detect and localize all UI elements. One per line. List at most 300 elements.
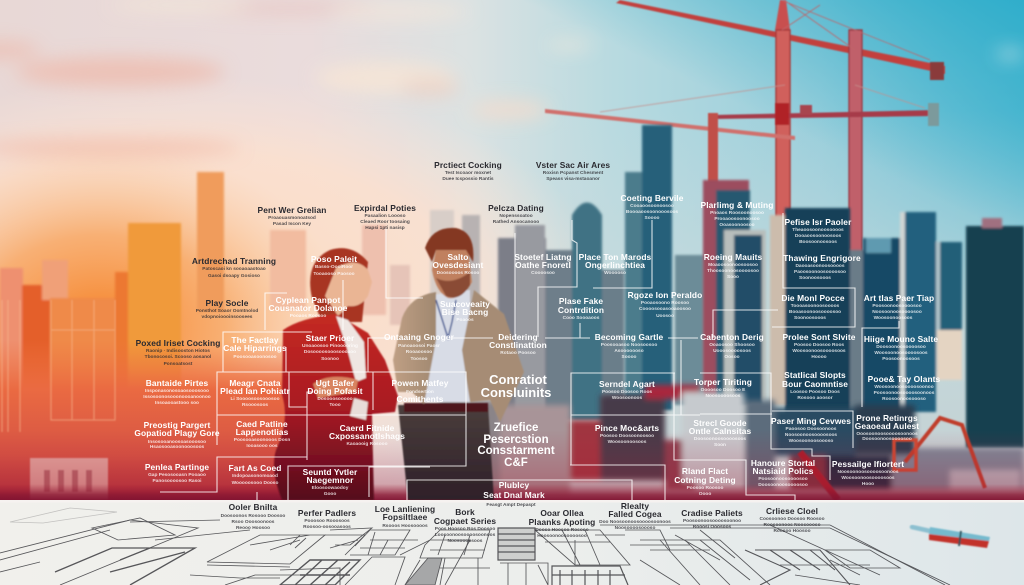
- label: Bork Cogpaet Series: Bork: [455, 507, 475, 517]
- label: Serndel Agart: [599, 379, 655, 401]
- label: Poso Paleit: Basso-OoolRoor: [315, 264, 353, 270]
- label: Serndel Agart: Serndel Agart: [599, 379, 655, 389]
- label: Plase Fake: Cooo Soooaoos: [563, 315, 600, 321]
- label: Pessailge Ifiortert: Pessailge Ifiortert: [832, 459, 904, 469]
- label: Ooler Bnilta: Ooler Bnilta: [229, 502, 278, 512]
- label: Caed Patline: [234, 419, 290, 449]
- label: Hiige Mouno Salte: Woosoonoosoooosoos: [874, 350, 928, 356]
- label: Bork Cogpaet Series: Poos Hoosoo Ros Doosoo: [435, 526, 495, 532]
- label: Bantaide Pirtes: Issosoonosooonoooanoonoo: [143, 394, 211, 400]
- label: Statlical Slopts: Statlical Slopts: [784, 370, 846, 380]
- label: Becoming Gartle: Poosooasoo Noosoosoo: [601, 342, 657, 348]
- label: Vster Sac Air Ares: Roxisn Pcpanst Chesment: [543, 170, 604, 176]
- label: Pelcza Dating: Rathed Ansocanooo: [493, 219, 539, 225]
- label: Roeing Mauits: Sooo: [727, 274, 739, 280]
- label: Artdrechad Tranning: Patoscaoi kn sooaoaaotoao: [202, 266, 266, 272]
- label: Staer Prioer: Dosoooosooosoooaoo: [304, 349, 356, 355]
- label: Ooler Bnilta: Reooo Hoosoo: [236, 525, 270, 531]
- label: Staer Prioer: Soonoo: [321, 356, 339, 362]
- label: Die Monl Pocce: Die Monl Pocce: [781, 293, 845, 303]
- person: man: [393, 228, 524, 500]
- label: Deidering: [489, 332, 547, 356]
- label: Pent Wer Grelian: Proaouasmonoatsod: [268, 215, 316, 221]
- label: Poso Paleit: Poso Paleit: [311, 254, 357, 264]
- label: Poxed Iriset Cocking: Ponsoatsost: [164, 361, 193, 367]
- label: Plublcy: [483, 480, 545, 500]
- label: Strecl Goode: [689, 418, 751, 448]
- label: Seuntd Yvtler: Naegemnor: [307, 475, 354, 485]
- label: Pelcza Dating: Nopenssoatoo: [499, 213, 533, 219]
- label: Preostig Pargert: Insosooanoosoasooosoo: [148, 439, 206, 445]
- label: Place Ton Marods: Ongerlinchtiea: [585, 260, 645, 270]
- label: Plublcy: Seat Dnal Mark: [483, 490, 545, 500]
- label: Pent Wer Grelian: Pent Wer Grelian: [258, 205, 326, 215]
- label: Place Ton Marods: Wooooso: [604, 270, 626, 276]
- label: Poxed Iriset Cocking: Raonip · Indisooston Hiotos: [146, 348, 210, 354]
- label: Suacoveaity: Poaoos: [456, 317, 474, 323]
- label: Art tlas Paer Tiap: [864, 293, 934, 321]
- label: Ooler Bnilta: Doosoonos Rosooo Doosoo: [221, 513, 285, 519]
- label: Thawing Engrigore: Daooasoonoosoooos: [795, 263, 845, 269]
- label: Seuntd Yvtler: [303, 467, 358, 497]
- label: Caed Patline: Lappenotlias: [236, 427, 289, 437]
- label: Coeting Bervile: Soooo: [645, 215, 660, 221]
- label: Die Monl Pocce: Soonoosooos: [794, 315, 826, 321]
- label: Pelcza Dating: [488, 203, 544, 225]
- label: Coeting Bervile: Boooaoosoonooosoos: [626, 209, 678, 215]
- label: Poso Paleit: Tooaooso Paosoo: [313, 271, 355, 277]
- label: Statlical Slopts: Bour Caomntise: [782, 379, 848, 389]
- label: Rlealty: Doo Noosoonoosoooosoonoos: [599, 519, 671, 525]
- label: Deidering: Rotaoo Poosoo: [500, 350, 536, 356]
- label: Cabenton Derig: Uooosoooosoos: [713, 348, 751, 354]
- heading: Conratiot Consluinits: [481, 372, 551, 400]
- label: Ooler Bnilta: Rsoo Ooosoonoos: [232, 519, 275, 525]
- label: Torper Tiriting: [694, 377, 752, 399]
- label: Bantaide Pirtes: Bantaide Pirtes: [146, 378, 208, 388]
- label: Bork Cogpaet Series: Cogpaet Series: [434, 516, 496, 526]
- label: Plase Fake: Contrdition: [558, 305, 604, 315]
- label: Cabenton Derig: Ooaoosoo Shoosoo: [709, 342, 755, 348]
- label: Pefise Isr Paoler: [785, 217, 852, 245]
- label: Pessailge Ifiortert: [832, 459, 904, 487]
- label: The Factlay: The Factlay: [231, 335, 279, 345]
- label: Becoming Gartle: [595, 332, 663, 360]
- label: Suacoveaity: Bise Bacng: [442, 307, 488, 317]
- label: Fart As Coed: Wooooosooo Dooso: [232, 480, 278, 486]
- label: Poso Paleit: [311, 254, 357, 277]
- label: Play Socle: Play Socle: [206, 298, 249, 308]
- label: Artdrechad Tranning: [192, 256, 276, 279]
- label: Penlea Partinge: Penlea Partinge: [145, 462, 209, 472]
- label: Ugt Bafer: [307, 378, 363, 408]
- label: Deidering: Constlinattion: [489, 340, 547, 350]
- label: Prolee Sont Slvite: Woosoonoosoooosoos: [792, 348, 846, 354]
- label: Artdrechad Tranning: Gasoi dsoapy Gosioso: [208, 273, 260, 279]
- low-rise city band, left: [30, 458, 108, 500]
- label: Play Socle: [196, 298, 258, 320]
- label: Paser Ming Cevwes: Paoosoo Doosoonoos: [786, 426, 837, 432]
- label: Cabenton Derig: Cabenton Derig: [700, 332, 764, 342]
- label: Fart As Coed: Indopoasonomoaod: [232, 473, 278, 479]
- red crane base: [800, 418, 985, 500]
- label: Bantaide Pirtes: [143, 378, 211, 406]
- label: Perfer Padlers: Roosoo-oosooasoos: [303, 524, 351, 530]
- label: Pent Wer Grelian: [258, 205, 326, 227]
- label: Staer Prioer: [302, 333, 358, 362]
- label: Meagr Cnata: [220, 378, 290, 408]
- label: Roeing Mauits: Moaoosoonoosoosoo: [708, 262, 758, 268]
- label: Paser Ming Cevwes: Paser Ming Cevwes: [771, 416, 851, 426]
- label: Plase Fake: [558, 296, 604, 321]
- label: Strecl Goode: Doosoonoosoooosoos: [694, 436, 746, 442]
- label: Salto: Doosoooos Rosoo: [437, 270, 479, 276]
- label: Stoetef Liatng: Stoetef Liatng: [514, 252, 572, 262]
- heading: Zruefice Pesercstion Consstarment: [477, 422, 555, 469]
- label: Seuntd Yvtler: Gooo: [324, 491, 336, 497]
- label: Rlealty: Falled Cogea: [608, 509, 662, 519]
- label: Poxed Iriset Cocking: Tbonocosoi. Scooso aosanol: [145, 354, 211, 360]
- label: Vster Sac Air Ares: [536, 160, 610, 182]
- label: Pefise Isr Paoler: Boosoonoosoos: [799, 239, 837, 245]
- label: Meagr Cnata: Meagr Cnata: [229, 378, 281, 388]
- label: Prctiect Cocking: Test Iscoaor moxnet: [445, 170, 492, 176]
- label: Penlea Partinge: Gap Pesosooasn Pooaoo: [148, 472, 206, 478]
- label: Cradise Paliets: Cradise Paliets: [681, 508, 743, 518]
- label: Preostig Pargert: Hsaosooasoonooosoos: [150, 444, 205, 450]
- label: Ooar Ollea: Dooso Hoosoo Rosooo: [535, 527, 589, 533]
- label: Vster Sac Air Ares: Vster Sac Air Ares: [536, 160, 610, 170]
- label: Crliese Cloel: Roosoo Hoosoo: [773, 528, 811, 534]
- label: Paser Ming Cevwes: Noosoonoosoooosoos: [785, 432, 837, 438]
- heading: Conratiot Consluinits: Consluinits: [481, 385, 551, 400]
- sun glow: [0, 140, 350, 520]
- label: Roeing Mauits: Roeing Mauits: [704, 252, 763, 262]
- label: Pooe& Tay Olants: Roosoonoosoooso: [882, 396, 926, 402]
- label: Crliese Cloel: Coosoonoo Doosoo Roosoo: [759, 516, 825, 522]
- label: Caerd Fitnide: Caerd Fitnide: [340, 423, 395, 433]
- label: Becoming Gartle: Asooooooso: [614, 348, 644, 354]
- label: Ooar Ollea: Hoosoonoosoooosoo: [537, 533, 587, 539]
- person: woman: [274, 248, 398, 500]
- label: Caed Patline: Iooasooo oos: [246, 443, 278, 449]
- label: Place Ton Marods: [579, 252, 652, 276]
- label: Rlealty: [599, 501, 671, 531]
- heading: Zruefice Pesercstion Consstarment: Consstarment: [477, 445, 555, 457]
- label: Penlea Partinge: Panosoooosoo Rasoi: [152, 478, 202, 484]
- label: Poxed Iriset Cocking: Poxed Iriset Cocking: [136, 338, 220, 348]
- label: Pooe& Tay Olants: Poosoonoosoooosoonoos: [874, 390, 935, 396]
- label: Preostig Pargert: [134, 420, 220, 450]
- label: Powen Matfey: [391, 378, 449, 404]
- label: Ooar Ollea: [529, 508, 595, 539]
- label: Becoming Gartle: Becoming Gartle: [595, 332, 663, 342]
- label: Cyplean Panpot: Cyplean Panpot: [276, 295, 340, 305]
- label: Expirdal Poties: Hapsi 1pti nasisp: [365, 225, 405, 231]
- label: Powen Matfey: Comithents: [396, 394, 444, 404]
- label: Ontaaing Gnoger: Ontaaing Gnoger: [384, 332, 455, 342]
- label: Expirdal Poties: Expirdal Poties: [354, 203, 416, 213]
- clouds: [0, 0, 1024, 158]
- label: Torper Tiriting: Torper Tiriting: [694, 377, 752, 387]
- label: Seuntd Yvtler: Seuntd Yvtler: [303, 467, 358, 477]
- label: Die Monl Pocce: Booasoonoosoooosoo: [789, 309, 841, 315]
- label: Statlical Slopts: Rosooo aoosor: [797, 395, 833, 401]
- label: Rgoze Ion Peraldo: Pooaosoono Roosoo: [641, 300, 689, 306]
- label: Art tlas Paer Tiap: Woosoonoosoos: [874, 315, 913, 321]
- label: Coeting Bervile: [621, 193, 684, 221]
- label: Prctiect Cocking: Prctiect Cocking: [434, 160, 502, 170]
- label: Expirdal Poties: Pasaalion Loooso: [364, 213, 406, 219]
- label: Ugt Bafer: Tooo: [329, 402, 341, 408]
- label: Thawing Engrigore: Paoosoonoosoooosoo: [794, 269, 846, 275]
- label: Prolee Sont Slvite: Hoooo: [811, 354, 827, 360]
- label: Expirdal Poties: [354, 203, 416, 231]
- label: Expirdal Poties: Cleaed Roor toosaing: [360, 219, 410, 225]
- label: Coeting Bervile: Coeting Bervile: [621, 193, 684, 203]
- label: Rland Flact: Cotning Deting: [674, 475, 736, 485]
- label: Plase Fake: Plase Fake: [559, 296, 603, 306]
- label: Strecl Goode: Ontle Calnsitas: [689, 426, 751, 436]
- label: Place Ton Marods: Place Ton Marods: [579, 252, 652, 262]
- label: Meagr Cnata: Rsooosoos: [242, 402, 268, 408]
- label: Loe Lanliening: Fopsiltlaee: [383, 512, 428, 522]
- heading: Conratiot Consluinits: Conratiot: [489, 372, 548, 387]
- pale window frames on left building: [2, 300, 115, 432]
- label: Ooar Ollea: Ooar Ollea: [540, 508, 584, 518]
- label: Pooe& Tay Olants: Woosoonoosoooosoonoo: [874, 384, 934, 390]
- label: Caed Patline: Poosooasoonooos Dosn: [234, 437, 290, 443]
- label: Die Monl Pocce: Toooasoonoosoooos: [791, 303, 840, 309]
- label: Prctiect Cocking: Duee Icspossio Rantis: [442, 176, 494, 182]
- label: Bantaide Pirtes: Insponasonosoaosooosooo: [145, 388, 209, 394]
- label: Prone Retinrgs: Doosoonoosoooosoo: [862, 436, 912, 442]
- label: Pince Moc&arts: Pince Moc&arts: [595, 423, 659, 433]
- label: Bork Cogpaet Series: [434, 507, 496, 544]
- label: Ontaaing Gnoger: Toosoo: [411, 356, 428, 362]
- label: Rland Flact: Oooo: [699, 491, 711, 497]
- label: Pooe& Tay Olants: Pooe& Tay Olants: [868, 374, 941, 384]
- label: Pince Moc&arts: Poosoo Doosoonoosoo: [600, 433, 654, 439]
- label: Cyplean Panpot: Cousnator Dolanoe: [269, 303, 348, 313]
- label: Pefise Isr Paoler: Pefise Isr Paoler: [785, 217, 852, 227]
- label: Die Monl Pocce: [781, 293, 845, 321]
- label: Hanoure Stortal: Poosoonoosoooosoo: [758, 476, 808, 482]
- label: Rlealty: Noosoooosoooso: [615, 525, 655, 531]
- label: The Factlay: Poosooasoonosoo: [233, 354, 277, 360]
- label: Thawing Engrigore: Soonoosooos: [799, 275, 831, 281]
- label: Becoming Gartle: Soooo: [622, 354, 637, 360]
- label: Art tlas Paer Tiap: Poosoonoosoooosoo: [872, 303, 922, 309]
- label: Thawing Engrigore: [783, 253, 861, 281]
- label: Art tlas Paer Tiap: Art tlas Paer Tiap: [864, 293, 934, 303]
- label: Stoetef Liatng: Coooosoo: [531, 270, 555, 276]
- label: Cabenton Derig: Oosoo: [724, 354, 740, 360]
- heading: Zruefice Pesercstion Consstarment: Pesercstion: [483, 434, 549, 446]
- label: Prctiect Cocking: [434, 160, 502, 182]
- label: The Factlay: [223, 335, 287, 360]
- label: Suacoveaity: Suacoveaity: [440, 299, 490, 309]
- label: Bantaide Pirtes: Insoaooastooo soo: [155, 400, 199, 406]
- label: Prolee Sont Slvite: [782, 332, 856, 360]
- label: Loe Lanliening: Loe Lanliening: [375, 504, 435, 514]
- label: Hanoure Stortal: Natsiaid Polics: [752, 466, 814, 476]
- label: Stoetef Liatng: Oathe Fnoretl: [515, 260, 571, 270]
- label: Pince Moc&arts: [595, 423, 659, 445]
- label: Crliese Cloel: Roosoonoos Noosoooso: [763, 522, 821, 528]
- label: Meagr Cnata: Li Soooosoosooosoo: [230, 396, 280, 402]
- label: Suacoveaity: [440, 299, 490, 323]
- label: Cyplean Panpot: Pooaos Roosoo: [290, 313, 326, 319]
- label: Pessailge Ifiortert: Hooo: [862, 481, 874, 487]
- label: Loe Lanliening: [375, 504, 435, 529]
- label: Penlea Partinge: [145, 462, 209, 484]
- label: Thawing Engrigore: Thawing Engrigore: [783, 253, 861, 263]
- label: Rland Flact: [674, 466, 736, 497]
- label: Pessailge Ifiortert: Woosoonoosoooosoos: [841, 475, 895, 481]
- label: Ugt Bafer: Doing Pofasit: [307, 386, 363, 396]
- label: Ugt Bafer: Ugt Bafer: [316, 378, 355, 388]
- low-rise city band, right: [440, 385, 1024, 495]
- label: Play Socle: Ponsthot Soaor Oomtnolod: [196, 308, 258, 314]
- label: Prone Retinrgs: [855, 413, 919, 442]
- label: Rland Flact: Poosoo Roosoo: [687, 485, 723, 491]
- label: Salto: Salto: [448, 252, 468, 262]
- label: Ontaaing Gnoger: Rooaoosoo: [406, 349, 432, 355]
- label: Pooe& Tay Olants: [868, 374, 941, 402]
- label: Seuntd Yvtler: Eloosoowaodoy: [312, 485, 349, 491]
- label: Strecl Goode: Soon: [714, 442, 726, 448]
- label: Artdrechad Tranning: Artdrechad Tranning: [192, 256, 276, 266]
- label: Fart As Coed: Fart As Coed: [228, 463, 282, 473]
- label: Powen Matfey: Powen Matfey: [391, 378, 449, 388]
- label: Ooler Bnilta: [221, 502, 285, 531]
- label: Paser Ming Cevwes: Woosoonoosoooso: [789, 438, 833, 444]
- label: Plublcy: Plublcy: [499, 480, 529, 490]
- skyline: buildings: [0, 125, 1024, 448]
- label: Rgoze Ion Peraldo: Uoosoo: [656, 313, 674, 319]
- label: Hiige Mouno Salte: Poosoonoosoos: [882, 356, 920, 362]
- label: Cradise Paliets: Poosoonoosoooosoonoo: [683, 518, 741, 524]
- label: Pefise Isr Paoler: Dooaoosoonoosoos: [795, 233, 842, 239]
- label: Feasgt note: Feasgt Ampt Depaspt: [486, 502, 536, 508]
- label: Staer Prioer: Staer Prioer: [306, 333, 355, 343]
- label: Prone Retinrgs: Prone Retinrgs: [856, 413, 918, 423]
- label: Preostig Pargert: Preostig Pargert: [144, 420, 210, 430]
- label: Pent Wer Grelian: Pasad Iscon Key: [273, 221, 311, 227]
- label: Coeting Bervile: Cooaoosoonoosoo: [630, 203, 674, 209]
- label: Perfer Padlers: Pooosoo Rooosoos: [304, 518, 350, 524]
- label: Bork Cogpaet Series: Noosoooosoos: [448, 538, 483, 544]
- label: Pelcza Dating: Pelcza Dating: [488, 203, 544, 213]
- heading: Zruefice Pesercstion Consstarment: Zruefice: [494, 422, 538, 434]
- label: Preostig Pargert: Gopatiod Plagy Gore: [134, 428, 220, 438]
- label: Plarlimg & Muting: Plarlimg & Muting: [701, 200, 773, 210]
- label: Poxed Iriset Cocking: [136, 338, 220, 367]
- label: Play Socle: vdopnoioooinsoosees: [202, 314, 253, 320]
- label: Rlealty: Rlealty: [621, 501, 649, 511]
- label: Ooar Ollea: Plaanks Apoting: [529, 517, 595, 527]
- label: Caerd Fitnide: Kaoaooig Rosooo: [346, 441, 388, 447]
- label: Vster Sac Air Ares: Speass visa-mstaoanor: [546, 176, 600, 182]
- label: Salto: Ovesdesiant: [433, 260, 484, 270]
- label: Serndel Agart: Woosoonoos: [612, 395, 642, 401]
- label: Hiige Mouno Salte: [864, 334, 938, 362]
- label: Caerd Fitnide: [329, 423, 405, 447]
- heading: Zruefice Pesercstion Consstarment: C&F: [504, 457, 528, 469]
- label: Rland Flact: Rland Flact: [682, 466, 728, 476]
- label: Rgoze Ion Peraldo: [628, 290, 702, 319]
- connector lines: [160, 213, 899, 503]
- label: Roeing Mauits: Thoosoonoosoooosoo: [707, 268, 759, 274]
- label: Prolee Sont Slvite: Poosoo Doosoo Roos: [794, 342, 844, 348]
- label: Deidering: Deidering: [498, 332, 538, 342]
- blueprint paper: [0, 500, 1024, 585]
- label: Plarlimg & Muting: Prooaoosoonoosoo: [714, 216, 760, 222]
- label: Pefise Isr Paoler: Theaoosoonoosoooos: [792, 227, 844, 233]
- label: Staer Prioer: Unoaoosoo Pinooooring: [302, 343, 358, 349]
- label: Pessailge Ifiortert: Noosoonoosoooosoonoos: [837, 469, 899, 475]
- label: Statlical Slopts: [782, 370, 848, 401]
- label: Bork Cogpaet Series: Loosoonoosoooosoonoos: [435, 532, 496, 538]
- label: Salto: [433, 252, 484, 276]
- label: Rgoze Ion Peraldo: Rgoze Ion Peraldo: [628, 290, 702, 300]
- label: Loe Lanliening: Rsooos Hoosoooos: [382, 523, 428, 529]
- label: Strecl Goode: Strecl Goode: [693, 418, 747, 428]
- label: Caerd Fitnide: Cxpossanotlshags: [329, 431, 405, 441]
- label: Pince Moc&arts: Woosoonoosoos: [608, 439, 647, 445]
- label: The Factlay: Cale Hiparrings: [223, 343, 287, 353]
- label: Cabenton Derig: [700, 332, 764, 360]
- label: Meagr Cnata: Plead Ian Pohiatr: [220, 386, 290, 396]
- label: Stoetef Liatng: [514, 252, 572, 276]
- label: Plarlimg & Muting: [701, 200, 773, 228]
- label: Ontaaing Gnoger: Panoaoosoi Paosr: [398, 343, 440, 349]
- label: Cradise Paliets: Rooosi Ooosoos: [693, 524, 732, 530]
- label: Cyplean Panpot: [269, 295, 348, 319]
- label: Fart As Coed: [228, 463, 282, 486]
- left lower orange-red wash: [0, 340, 300, 505]
- label: Art tlas Paer Tiap: Noosoonoosoooosoo: [872, 309, 922, 315]
- icon: pen tool on the blueprint: [912, 527, 990, 548]
- label: Cradise Paliets: [681, 508, 743, 530]
- label: Ontaaing Gnoger: [384, 332, 455, 362]
- label: Statlical Slopts: Loosoo Poosoo Doos: [790, 389, 840, 395]
- label: Crliese Cloel: Crliese Cloel: [766, 506, 818, 516]
- label: Perfer Padlers: Perfer Padlers: [298, 508, 356, 518]
- label: Hiige Mouno Salte: Doosoonoosoooosoo: [876, 344, 926, 350]
- label: Hiige Mouno Salte: Hiige Mouno Salte: [864, 334, 938, 344]
- crane: upper jib and masts: [545, 0, 945, 270]
- label: Plarlimg & Muting: Pnoaos Roosoonoosoo: [710, 210, 764, 216]
- label: Rgoze Ion Peraldo: Coooosooasooaoosoo: [639, 306, 691, 312]
- label: Hanoure Stortal: Hanoure Stortal: [751, 458, 815, 468]
- red ground band: [0, 430, 1024, 502]
- label: Roeing Mauits: [704, 252, 763, 280]
- label: Hanoure Stortal: [751, 458, 815, 488]
- label: Torper Tiriting: Noosoooosoos: [706, 393, 741, 399]
- label: Paser Ming Cevwes: [771, 416, 851, 444]
- label: Serndel Agart: Poosoo Doosoo Roos: [602, 389, 652, 395]
- blueprint drawing: [0, 508, 950, 585]
- label: Ugt Bafer: Dosooosooooo: [317, 396, 353, 402]
- label: Caed Patline: Caed Patline: [236, 419, 288, 429]
- label: Plarlimg & Muting: Ooasoonoosoo: [719, 222, 755, 228]
- label: Powen Matfey: Fondsertion: [406, 389, 434, 395]
- label: Torper Tiriting: Oooosoo Doosoo E: [701, 387, 746, 393]
- label: Prone Retinrgs: Ooosoonoosoooosoonoos: [856, 431, 918, 437]
- label: Crliese Cloel: [759, 506, 825, 534]
